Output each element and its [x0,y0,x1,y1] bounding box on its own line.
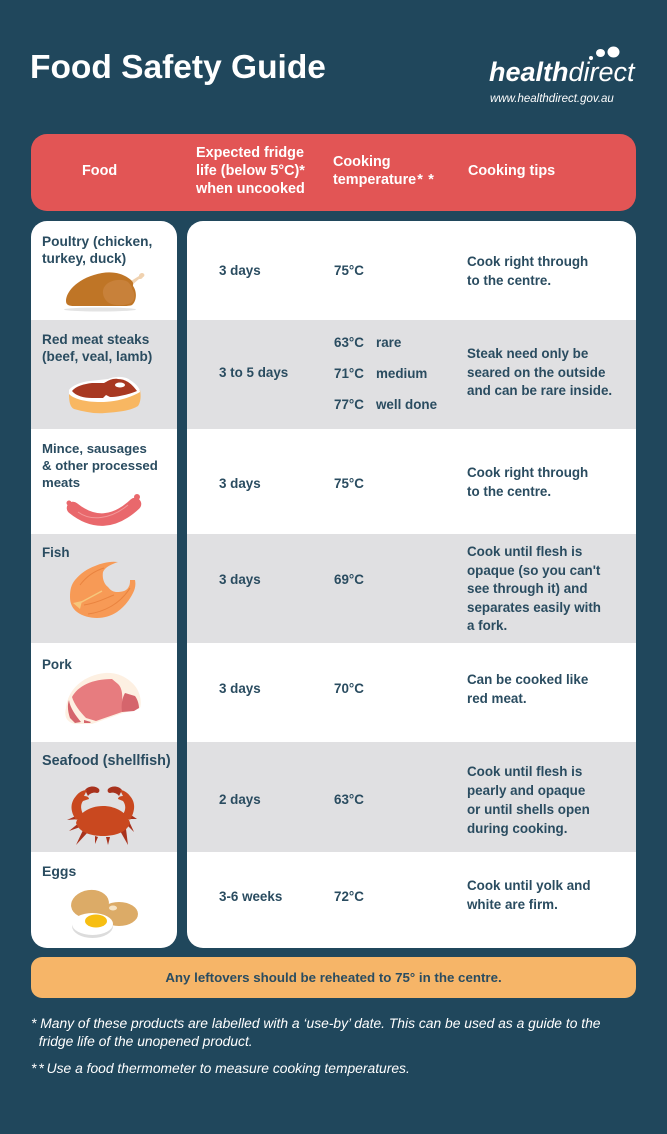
row: mince details [219,465,588,499]
tip: or until shells open [467,802,590,817]
food label: fish: Fish [42,545,70,560]
header: cooking tips: Cooking tips [468,163,555,179]
tip: Cook until yolk and [467,878,590,893]
tip [467,878,590,912]
icon: sausage [66,494,142,526]
tip: Cook until flesh is [467,764,582,779]
food label: red meat [42,332,152,364]
logo: healthdirect [489,46,636,105]
logo url: www.healthdirect.gov.au [490,93,614,105]
header: cooking temperature: temperature** [333,172,439,188]
tip [467,544,601,633]
tip: to the centre. [467,273,551,288]
logo wordmark: healthdirect [489,57,635,87]
row: eggs details [219,878,590,912]
tip [467,254,588,288]
tip: Steak need only be [467,346,588,361]
icon: crab [67,786,137,845]
header: fridge life: when uncooked [196,181,305,197]
food label: mince: & other processed [42,458,158,473]
panel: food column [31,221,177,948]
tip: separates easily with [467,600,601,614]
temperature: 72°C [334,889,364,904]
fridge life: 3 days [219,681,261,696]
icon: salmon steak [70,562,136,618]
tip: Cook right through [467,465,588,480]
row: seafood details [219,764,590,836]
tip: Cook right through [467,254,588,269]
row: poultry details [219,254,588,288]
tip: during cooking. [467,821,567,836]
callout: leftovers: Any leftovers should be reheated to 75° in the centre. [165,970,502,985]
food label: eggs: Eggs [42,863,76,879]
tip [467,764,590,836]
header: fridge life: life (below 5°C)* [196,163,305,179]
footnote: use-by [31,1015,600,1049]
temperature: 75°C [334,263,364,278]
tip: and can be rare inside. [467,383,612,398]
tip [467,346,612,398]
doneness: medium [376,366,427,381]
doneness: well done [376,397,437,412]
food label: seafood: Seafood (shellfish) [42,753,171,769]
title: Food Safety Guide [30,49,326,86]
food label: mince: Mince, sausages [42,441,147,456]
tip: red meat. [467,691,527,706]
icon: eggs [71,890,138,938]
food label: red meat: (beef, veal, lamb) [42,349,152,364]
temperature: 63°C [334,792,364,807]
food label: mince: meats [42,475,80,490]
fridge life: 2 days [219,792,261,807]
tip: see through it) and [467,581,588,596]
fridge life: 3 days [219,476,261,491]
temperatures [334,335,364,412]
header: fridge life [196,145,305,197]
tip: a fork. [467,618,507,633]
footnote: thermometer: ** Use a food thermometer to measure cooking temperatures. [31,1060,410,1076]
fridge life: 3-6 weeks [219,889,282,904]
row: red meat details [219,335,612,412]
temperature: 69°C [334,572,364,587]
tip: opaque (so you can't [467,562,600,578]
doneness [376,335,437,412]
tip: pearly and opaque [467,783,585,798]
logo dots [589,46,620,60]
food label: poultry: turkey, duck) [42,251,126,266]
panel: details column [187,221,636,948]
tip [467,672,588,706]
doneness: rare [376,335,401,350]
tip [467,465,588,499]
row: fish details [219,544,601,633]
header: cooking temperature [333,154,439,188]
food label: pork: Pork [42,657,72,672]
row bands [31,320,177,852]
tip: Cook until flesh is [467,544,582,559]
fridge life: 3 days [219,572,261,587]
temperatures: 63°C [334,335,364,350]
tip: Can be cooked like [467,672,588,687]
header bar [31,134,636,211]
footnote: use-by: * Many of these products are labelled with a ‘use-by’ date. This can be used as a guide to the [31,1015,600,1031]
food label: poultry: Poultry (chicken, [42,234,152,249]
temperatures: 71°C [334,366,364,381]
row: pork details [219,672,588,706]
food label: mince [42,441,158,490]
callout: leftovers [31,957,636,998]
icon: steak [69,377,141,414]
fridge life: 3 to 5 days [219,365,288,380]
tip: to the centre. [467,484,551,499]
header: food: Food [82,163,117,179]
header: cooking temperature: Cooking [333,154,391,170]
temperature: 70°C [334,681,364,696]
tip: seared on the outside [467,364,605,380]
icon: roast chicken [64,272,144,312]
temperatures: 77°C [334,397,364,412]
header: fridge life: Expected fridge [196,145,304,161]
food label: poultry [42,234,152,266]
fridge life: 3 days [219,263,261,278]
temperature: 75°C [334,476,364,491]
footnote: use-by: fridge life of the unopened product. [39,1033,253,1049]
icon: pork cut [65,673,141,724]
row bands [187,320,636,852]
food label: red meat: Red meat steaks [42,332,149,347]
tip: white are firm. [467,897,558,912]
